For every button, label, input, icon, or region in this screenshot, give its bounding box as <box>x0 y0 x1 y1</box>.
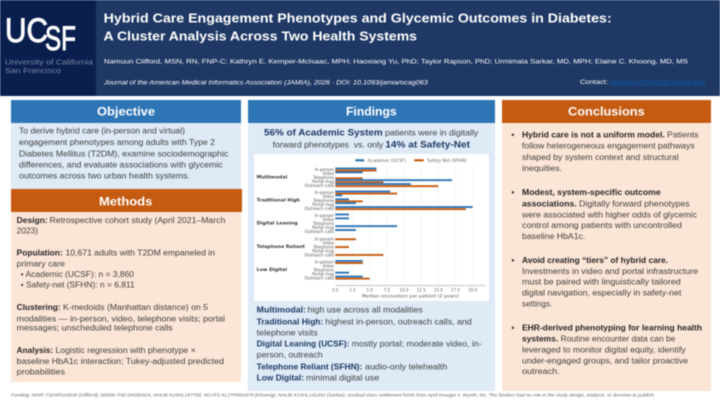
logo: UCSF: SF <box>45 20 76 58</box>
chart group: traditional high: Telephone <box>312 198 334 203</box>
methods: population <box>17 249 215 290</box>
logo: UCSF: University of California <box>5 59 93 66</box>
heading: conclusions: Conclusions <box>568 105 645 119</box>
chart group: low digital <box>257 260 370 280</box>
conclusion 1 <box>512 131 699 173</box>
conclusion 4: systems. <box>522 335 558 344</box>
conclusion 2 <box>512 188 697 241</box>
conclusion 3: Avoid creating “tiers” of hybrid care. <box>522 256 668 265</box>
chart legend <box>355 158 467 163</box>
contact: namuun.clifford@utexas.edu <box>609 79 706 86</box>
conclusion 2: were associated with higher odds of glycemic <box>521 210 697 219</box>
chart group: multimodal: Video <box>323 171 334 176</box>
chart group: low digital: Portal msg <box>312 272 334 276</box>
methods: analysis: probabilities <box>17 368 65 377</box>
phenotype descriptions <box>257 306 482 383</box>
phenotype descriptions: Low Digital: <box>257 374 304 383</box>
chart group: telephone reliant: Telephone <box>312 244 334 250</box>
chart group: telephone reliant <box>257 236 383 258</box>
methods: analysis: Logistic regression with phenotype × <box>56 346 196 355</box>
methods: design: 2023) <box>17 227 38 236</box>
chart group: low digital: Outreach calls <box>305 276 334 280</box>
methods: clustering: Clustering: <box>17 303 61 312</box>
phenotype descriptions: mostly portal; moderate video, in- <box>352 340 482 349</box>
conclusion 3: • <box>512 256 514 265</box>
objective text: To derive hybrid care (in-person and virtual) <box>19 127 185 136</box>
chart group: traditional high: Traditional High <box>257 198 300 204</box>
methods: population: Population: <box>17 249 63 258</box>
header banner <box>0 0 720 96</box>
chart group: traditional high: In-person <box>315 190 334 195</box>
methods: population: 10,671 adults with T2DM empaneled in <box>66 249 215 258</box>
methods: population: • Safety-net (SFHN): n = 6,811 <box>21 281 135 290</box>
key finding callout: patients were in digitally <box>385 129 478 138</box>
conclusion 2: baseline HbA1c. <box>522 232 585 241</box>
chart group: low digital: In-person <box>315 260 334 264</box>
key finding callout: 14% at Safety-Net <box>385 139 470 150</box>
chart group: multimodal: Outreach calls <box>305 183 334 188</box>
chart group: multimodal: In-person <box>315 167 334 172</box>
heading: findings: Findings <box>346 104 397 118</box>
chart group: low digital: Telephone <box>312 268 334 272</box>
heading: objective: Objective <box>97 105 155 119</box>
methods: analysis: baseline HbA1c interaction; Tukey-adjusted predicted <box>17 357 224 366</box>
conclusion 4: • <box>512 324 514 333</box>
phenotype descriptions: minimal digital use <box>306 374 380 383</box>
phenotype descriptions: Digital Leaning (UCSF): <box>257 340 349 349</box>
chart group: traditional high: Video <box>323 194 334 199</box>
funding footnote: Funding: NINR T32NR019035 (Clifford); NIDDK P30 DK092924, NHLBI K23HL157750, NCATS KL2TR001870 (Khoong); NHLBI K24HL141354 (Sarkar); residual class settlement funds from April Krueger v. Wyeth, Inc. The funders had no role in the study design, analysis, or decision to publish. <box>11 393 655 398</box>
methods: design <box>17 216 225 236</box>
conclusion 1: Patients <box>667 131 699 140</box>
conclusion 2: • <box>512 188 514 197</box>
chart group: digital leaning <box>257 213 397 234</box>
chart group: digital leaning: Telephone <box>312 221 334 226</box>
title <box>104 11 612 44</box>
contact <box>580 79 706 86</box>
chart group: traditional high: Portal msg <box>312 202 334 207</box>
chart legend: Academic (UCSF) <box>368 158 406 163</box>
panel: methods <box>11 189 242 382</box>
logo: UCSF <box>0 0 96 96</box>
conclusion 1: • <box>512 131 514 140</box>
journal citation: Journal of the American Medical Informatics Association (JAMIA), 2026 · DOI: 10.1093/jamia/ocag063 <box>103 79 428 86</box>
bar chart <box>254 154 489 301</box>
phenotype descriptions: audio-only telehealth <box>365 363 447 372</box>
conclusion 3 <box>512 256 699 308</box>
chart group: traditional high: Outreach calls <box>305 206 334 211</box>
chart x axis: 15.0 <box>434 288 443 292</box>
chart group: traditional high <box>257 190 473 211</box>
phenotype descriptions: Traditional High: <box>257 318 323 327</box>
chart group: low digital: Low Digital <box>257 267 287 273</box>
chart legend: Safety Net (SFHN) <box>427 158 467 163</box>
conclusion 4: leveraged to monitor digital equity, identify <box>522 345 686 354</box>
heading: methods: Methods <box>99 195 153 209</box>
conclusion 1: inequities. <box>522 164 562 173</box>
phenotype descriptions: high use across all modalities <box>308 306 423 315</box>
conclusion 1: shaped by system context and structural <box>522 153 679 162</box>
panel: conclusions <box>502 100 711 391</box>
key finding callout: forward phenotypes vs. only <box>273 141 383 150</box>
objective text: engagement phenotypes among adults with Type 2 <box>19 138 215 147</box>
conclusion 1: follow heterogeneous engagement pathways <box>522 142 695 151</box>
logo: UCSF: UC <box>5 12 48 50</box>
methods: analysis <box>17 346 224 377</box>
chart x axis: 7.5 <box>384 288 390 292</box>
chart group: multimodal <box>257 167 452 188</box>
conclusion 4: outreach. <box>522 367 560 376</box>
methods: clustering: modalities — in-person, video, telephone visits; portal <box>17 314 225 323</box>
authors: Namuun Clifford, MSN, RN, FNP-C; Kathryn E. Kemper-McIsaac, MPH; Haoxiang Yu, PhD; Taylor Rapson, PhD; Urmimala Sarkar, MD, MPH; Elaine C. Khoong, MD, MS <box>104 59 689 66</box>
phenotype descriptions: Multimodal: <box>257 306 306 315</box>
objective text: Diabetes Mellitus (T2DM), examine sociodemographic <box>19 149 228 158</box>
methods: clustering: messages; unscheduled telephone calls <box>17 324 173 333</box>
title: A Cluster Analysis Across Two Health Systems <box>104 29 417 44</box>
title: Hybrid Care Engagement Phenotypes and Glycemic Outcomes in Diabetes: <box>104 11 612 26</box>
phenotype descriptions: person, outreach <box>257 351 323 360</box>
chart group: multimodal: Portal msg <box>312 179 334 184</box>
panel: findings <box>248 100 495 391</box>
conclusion 4 <box>512 324 702 376</box>
chart x axis: 0.0 <box>332 288 339 292</box>
chart x axis: 20.0 <box>468 288 478 292</box>
objective text: outcomes across two urban health systems. <box>19 172 190 181</box>
conclusion 4: EHR-derived phenotyping for learning health <box>522 324 702 333</box>
chart group: telephone reliant: Telephone Reliant <box>257 244 306 250</box>
chart group: telephone reliant: In-person <box>315 236 334 242</box>
conclusion 2: Digitally forward phenotypes <box>579 199 690 208</box>
methods: clustering: K-medoids (Manhattan distance) on 5 <box>63 303 209 312</box>
key finding callout: 56% of Academic System <box>264 127 383 138</box>
objective text <box>19 127 228 181</box>
chart group: multimodal: Telephone <box>312 175 334 180</box>
conclusion 1: Hybrid care is not a uniform model. <box>522 131 665 140</box>
conclusion 3: digital navigation, especially in safety-net <box>522 289 682 298</box>
logo: UCSF: San Francisco <box>5 68 61 75</box>
phenotype descriptions: Telephone Reliant (SFHN): <box>257 363 362 372</box>
chart group: digital leaning: In-person <box>315 213 334 218</box>
contact: Contact: <box>580 79 608 86</box>
chart group: digital leaning: Digital Leaning <box>257 221 298 227</box>
methods: population: primary care <box>17 260 66 269</box>
chart x axis <box>332 286 486 300</box>
phenotype descriptions: highest in-person, outreach calls, and <box>325 318 472 327</box>
objective text: differences, and evaluate associations with glycemic <box>19 161 223 170</box>
phenotype descriptions: telephone visits <box>257 329 318 338</box>
conclusion 4: under-engaged groups, and tailor proactive <box>522 356 689 365</box>
chart group: digital leaning: Video <box>323 217 334 222</box>
chart group: telephone reliant: Video <box>323 240 334 246</box>
methods: clustering <box>17 303 225 333</box>
methods: design: Retrospective cohort study (April 2021–March <box>50 216 225 225</box>
chart group: telephone reliant: Portal msg <box>312 248 334 254</box>
key finding callout <box>264 127 478 150</box>
methods: population: • Academic (UCSF): n = 3,860 <box>21 270 135 279</box>
panel: objective <box>11 100 241 189</box>
chart x axis: 10.0 <box>400 288 409 292</box>
chart group: digital leaning: Outreach calls <box>305 229 334 234</box>
conclusion 2: control among patients with uncontrolled <box>522 221 682 230</box>
methods: design: Design: <box>17 216 48 225</box>
chart group: multimodal: Multimodal <box>257 174 288 180</box>
chart group: telephone reliant: Outreach calls <box>305 252 334 258</box>
chart group: digital leaning: Portal msg <box>312 225 334 230</box>
chart x axis: 2.5 <box>349 288 356 292</box>
conclusion 3: must be paired with linguistically tailored <box>522 278 681 287</box>
conclusion 3: Investments in video and portal infrastructure <box>522 267 699 276</box>
chart x axis: 12.5 <box>417 288 426 292</box>
conclusion 2: Modest, system-specific outcome <box>522 188 661 197</box>
conclusion 4: Routine encounter data can be <box>561 335 676 344</box>
methods: analysis: Analysis: <box>17 346 53 355</box>
chart group: low digital: Video <box>323 264 334 268</box>
chart x axis: Median encounters per patient (2 years) <box>362 294 459 300</box>
conclusion 3: settings. <box>522 299 552 308</box>
conclusion 2: associations. <box>522 199 577 208</box>
chart x axis: 5.0 <box>366 288 373 292</box>
chart x axis: 17.5 <box>451 288 460 292</box>
